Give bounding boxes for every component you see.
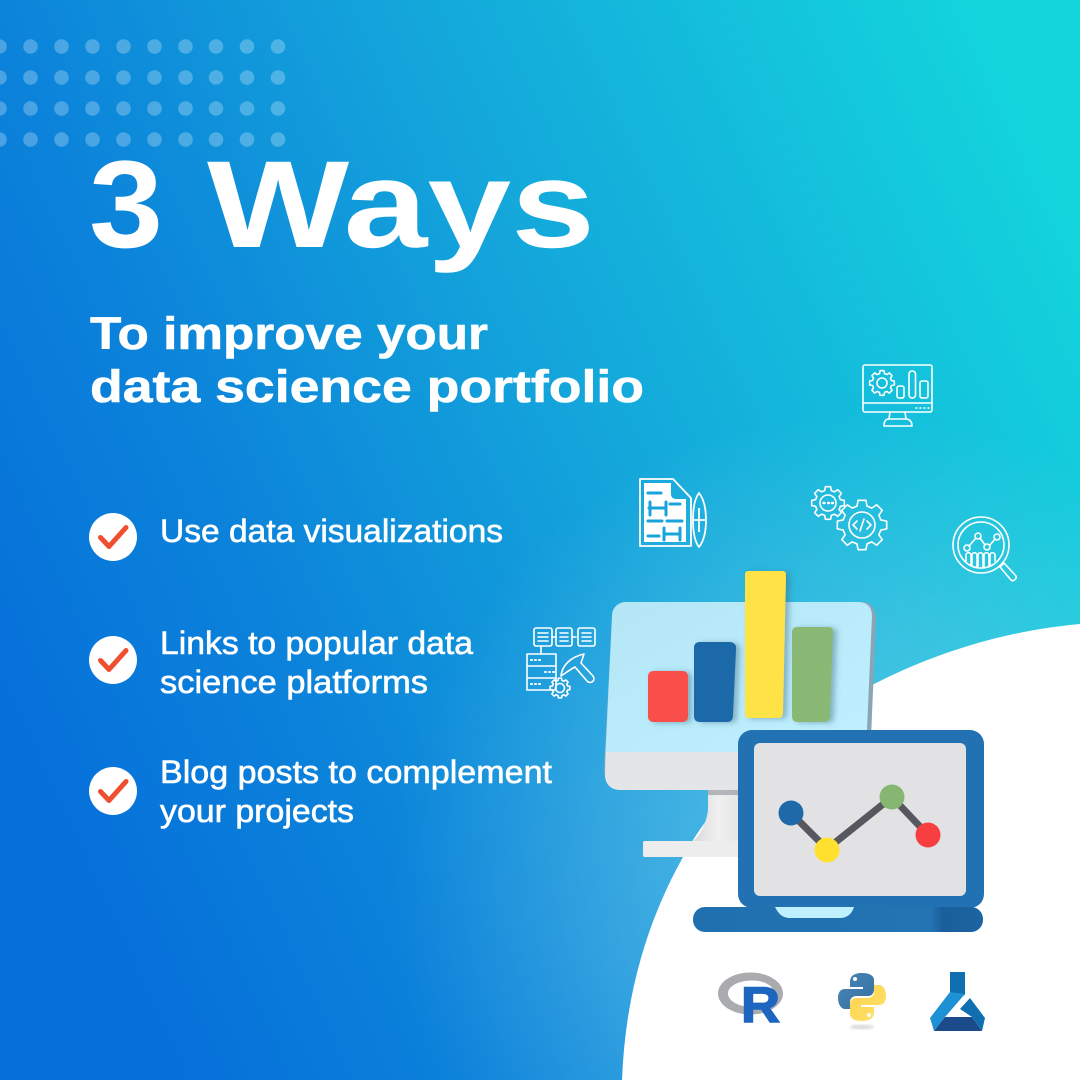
logo: flask	[930, 972, 985, 1031]
item: blog posts: your projects	[160, 793, 354, 829]
title	[89, 136, 595, 274]
icon: document with pen	[640, 479, 706, 547]
laptop illustration	[693, 730, 984, 932]
item: use data visualizations	[89, 513, 503, 561]
item: blog posts: Blog posts to complement	[160, 754, 552, 790]
checklist	[89, 513, 552, 829]
subtitle: To improve your	[90, 308, 488, 359]
monitor stand	[643, 788, 745, 857]
white curved corner shape	[622, 624, 1080, 1080]
item: links to platforms	[89, 625, 473, 700]
logo: R	[718, 972, 783, 1033]
icon: gears with code	[812, 487, 887, 550]
logo: Python	[838, 973, 886, 1030]
subtitle	[90, 308, 644, 412]
logo: R: R	[741, 977, 780, 1033]
icon: monitor with gear and bars	[863, 365, 932, 426]
subtitle: data science portfolio	[90, 361, 644, 412]
monitor illustration	[604, 571, 876, 857]
monitor body	[604, 602, 876, 790]
laptop screen	[754, 743, 966, 896]
icon: database, tables and hammer	[527, 628, 595, 698]
item: blog posts	[89, 754, 552, 829]
title: 3	[89, 136, 163, 274]
laptop base	[693, 907, 983, 932]
item: use data visualizations: Use data visualizations	[160, 513, 503, 549]
title: Ways	[207, 136, 595, 274]
item: links to platforms: science platforms	[160, 664, 428, 700]
line chart	[778, 784, 940, 862]
laptop frame	[738, 730, 984, 908]
item: links to platforms: Links to popular data	[160, 625, 473, 661]
bar chart	[648, 571, 833, 722]
icon: magnifier with chart	[953, 517, 1016, 581]
dot pattern	[0, 39, 285, 147]
